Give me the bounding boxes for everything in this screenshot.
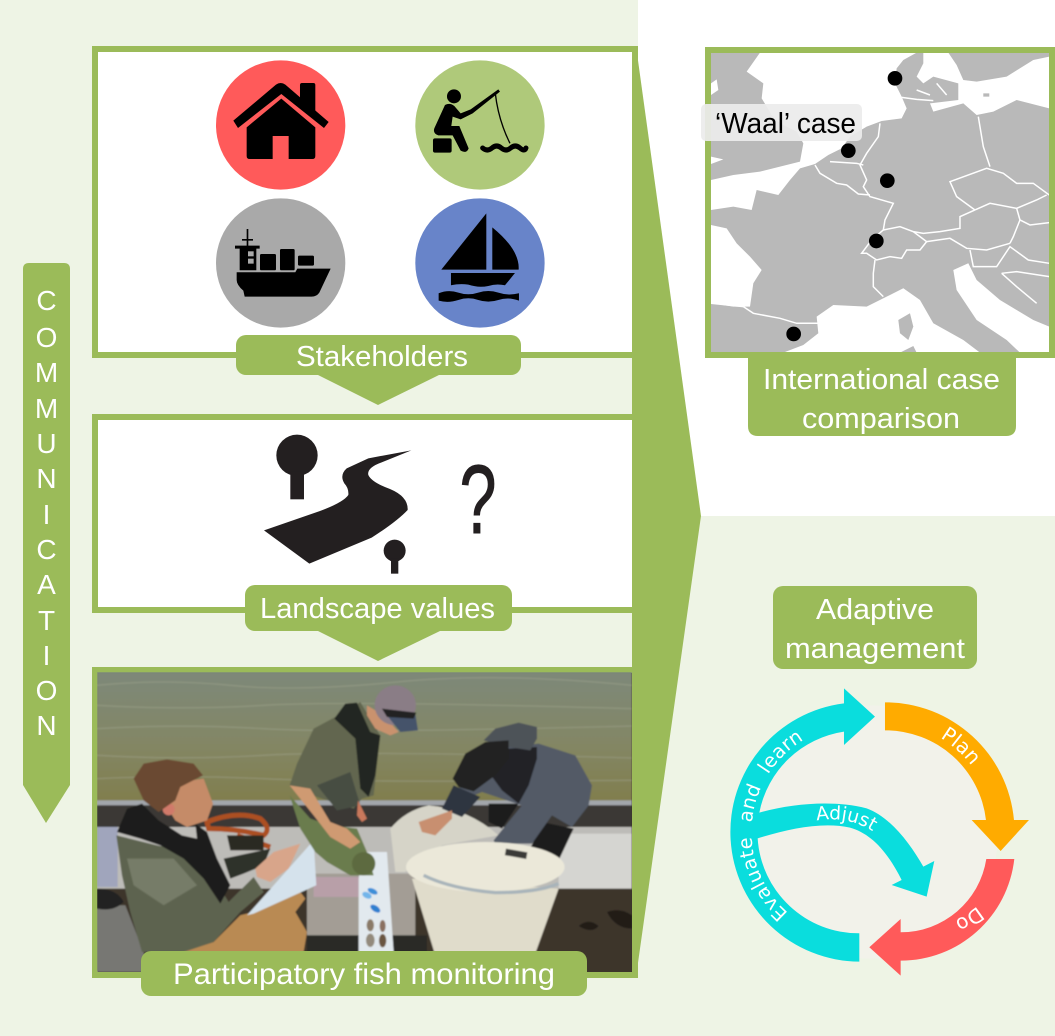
communication arrow: N (36, 710, 57, 741)
icon group: stakeholder circles (216, 60, 545, 328)
panel: participatory fish monitoring photo (95, 670, 635, 975)
icon: question mark: ? (460, 445, 496, 554)
label: adaptive management: management (785, 633, 965, 665)
arrow: evaluate and learn with adjust branch: Adjust (816, 805, 878, 831)
icon: house (216, 60, 345, 190)
icon: angler (415, 60, 545, 190)
communication arrow: O (36, 675, 57, 706)
label: landscape values with down arrow: Landscape values (260, 593, 495, 625)
communication arrow: C (36, 285, 57, 316)
map of western Europe (711, 53, 1049, 353)
communication arrow: N (36, 463, 57, 494)
communication arrow: I (43, 499, 50, 530)
communication arrow: O (36, 322, 57, 353)
communication arrow: M (35, 357, 58, 388)
arrow: plan (884, 702, 1029, 851)
arrow: evaluate and learn with adjust branch (730, 688, 934, 962)
case study location dots (786, 71, 902, 341)
person: middle man (290, 795, 374, 875)
label: participatory fish monitoring (141, 951, 587, 996)
front bucket (412, 878, 560, 951)
back bucket (390, 805, 499, 872)
communication arrow: A (37, 569, 56, 600)
label: international case comparison: comparison (802, 403, 960, 435)
big arrow linking panels to the right column (632, 46, 701, 977)
communication arrow: U (36, 428, 57, 459)
map frame (708, 50, 1052, 355)
water and boat (97, 672, 632, 805)
communication arrow: C (36, 534, 57, 565)
communication arrow (23, 263, 70, 823)
person: right man (530, 822, 574, 860)
communication arrow: I (43, 640, 50, 671)
communication arrow: T (38, 605, 55, 636)
arrow: evaluate and learn with adjust branch: Evaluate and learn (740, 732, 802, 922)
arrow: do: Do (957, 907, 984, 928)
panel: stakeholders (95, 49, 635, 355)
adaptive management cycle (730, 688, 1029, 976)
label: international case comparison (748, 352, 1016, 436)
panel: landscape values (95, 417, 635, 610)
person: left man (184, 892, 308, 951)
label: adaptive management: Adaptive (816, 594, 934, 626)
label: participatory fish monitoring: Participatory fish monitoring (173, 958, 555, 991)
icon: sailboat (415, 198, 545, 328)
icon: cargo ship (216, 198, 345, 328)
photo: three people sampling fish on a boat (97, 672, 632, 972)
label: stakeholders with down arrow: Stakeholders (296, 341, 468, 373)
icon: river landscape (264, 435, 411, 574)
label: adaptive management (773, 586, 977, 669)
panel: international map (701, 50, 1052, 355)
label: stakeholders with down arrow (236, 335, 521, 405)
arrow: do (869, 859, 1014, 976)
arrow: plan: Plan (942, 726, 978, 764)
communication arrow: M (35, 393, 58, 424)
callout: Waal case: ‘Waal’ case (715, 108, 856, 140)
label: landscape values with down arrow (245, 585, 512, 661)
label: international case comparison: International case (763, 364, 1000, 396)
